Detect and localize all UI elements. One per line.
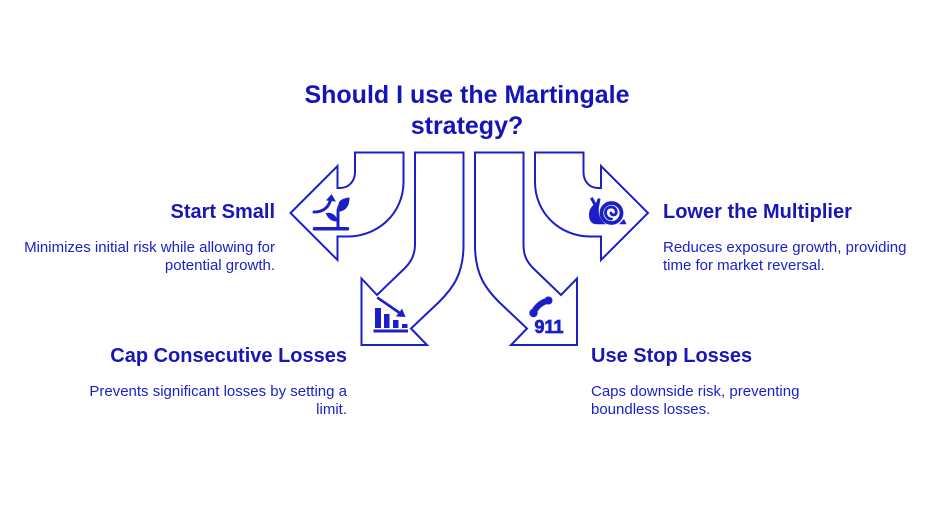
heading: cap consecutive losses: Cap Consecutive Losses (110, 345, 347, 367)
text: start small description: potential growth. (165, 257, 275, 274)
text: start small description (24, 239, 275, 274)
icon: sprout with rising arrow (314, 195, 349, 229)
icon: falling bar chart (374, 296, 408, 332)
text: use stop losses description: boundless losses. (591, 401, 710, 418)
heading: use stop losses: Use Stop Losses (591, 345, 752, 367)
text: cap consecutive losses description: limit. (316, 401, 347, 418)
arrow: use stop losses (475, 152, 577, 345)
icon: snail (589, 197, 626, 224)
text: cap consecutive losses description: Prevents significant losses by setting a (89, 383, 347, 400)
arrow: lower the multiplier (535, 152, 648, 260)
heading: start small: Start Small (171, 201, 275, 223)
arrow: cap consecutive losses (362, 152, 464, 345)
title: strategy? (411, 112, 523, 140)
heading: lower the multiplier: Lower the Multiplier (663, 201, 852, 223)
title: Should I use the Martingale (304, 81, 630, 109)
text: lower the multiplier description (663, 239, 906, 274)
text: cap consecutive losses description (89, 383, 347, 418)
title (304, 81, 630, 140)
arrow: start small (290, 152, 404, 260)
text: lower the multiplier description: Reduces exposure growth, providing (663, 239, 906, 256)
text: use stop losses description (591, 383, 799, 418)
icon: phone 911: 911 (534, 317, 564, 337)
text: lower the multiplier description: time for market reversal. (663, 257, 825, 274)
icon: phone 911 (529, 296, 564, 337)
text: start small description: Minimizes initial risk while allowing for (24, 239, 275, 256)
text: use stop losses description: Caps downside risk, preventing (591, 383, 799, 400)
